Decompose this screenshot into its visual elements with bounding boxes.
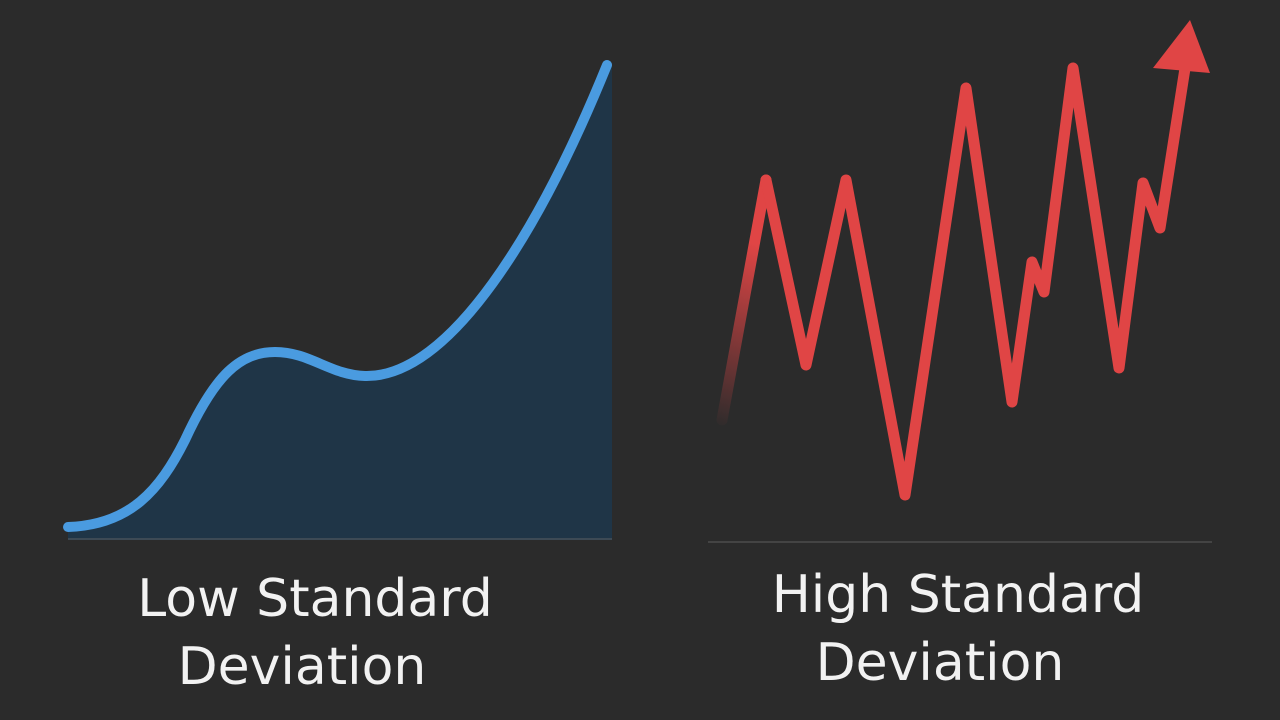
arrowhead [1153,20,1210,73]
label: low deviation line 2: Deviation [178,637,426,697]
blue smooth curve [68,65,607,527]
red zigzag line [766,62,1186,495]
label: high deviation line 2: Deviation [816,633,1064,693]
faded start segment [722,180,766,420]
chart: low standard deviation [68,65,612,539]
label: low standard deviation: Low Standard [137,569,493,629]
area fill [68,65,612,538]
chart: high standard deviation [708,20,1212,542]
label: high standard deviation: High Standard [772,565,1144,625]
